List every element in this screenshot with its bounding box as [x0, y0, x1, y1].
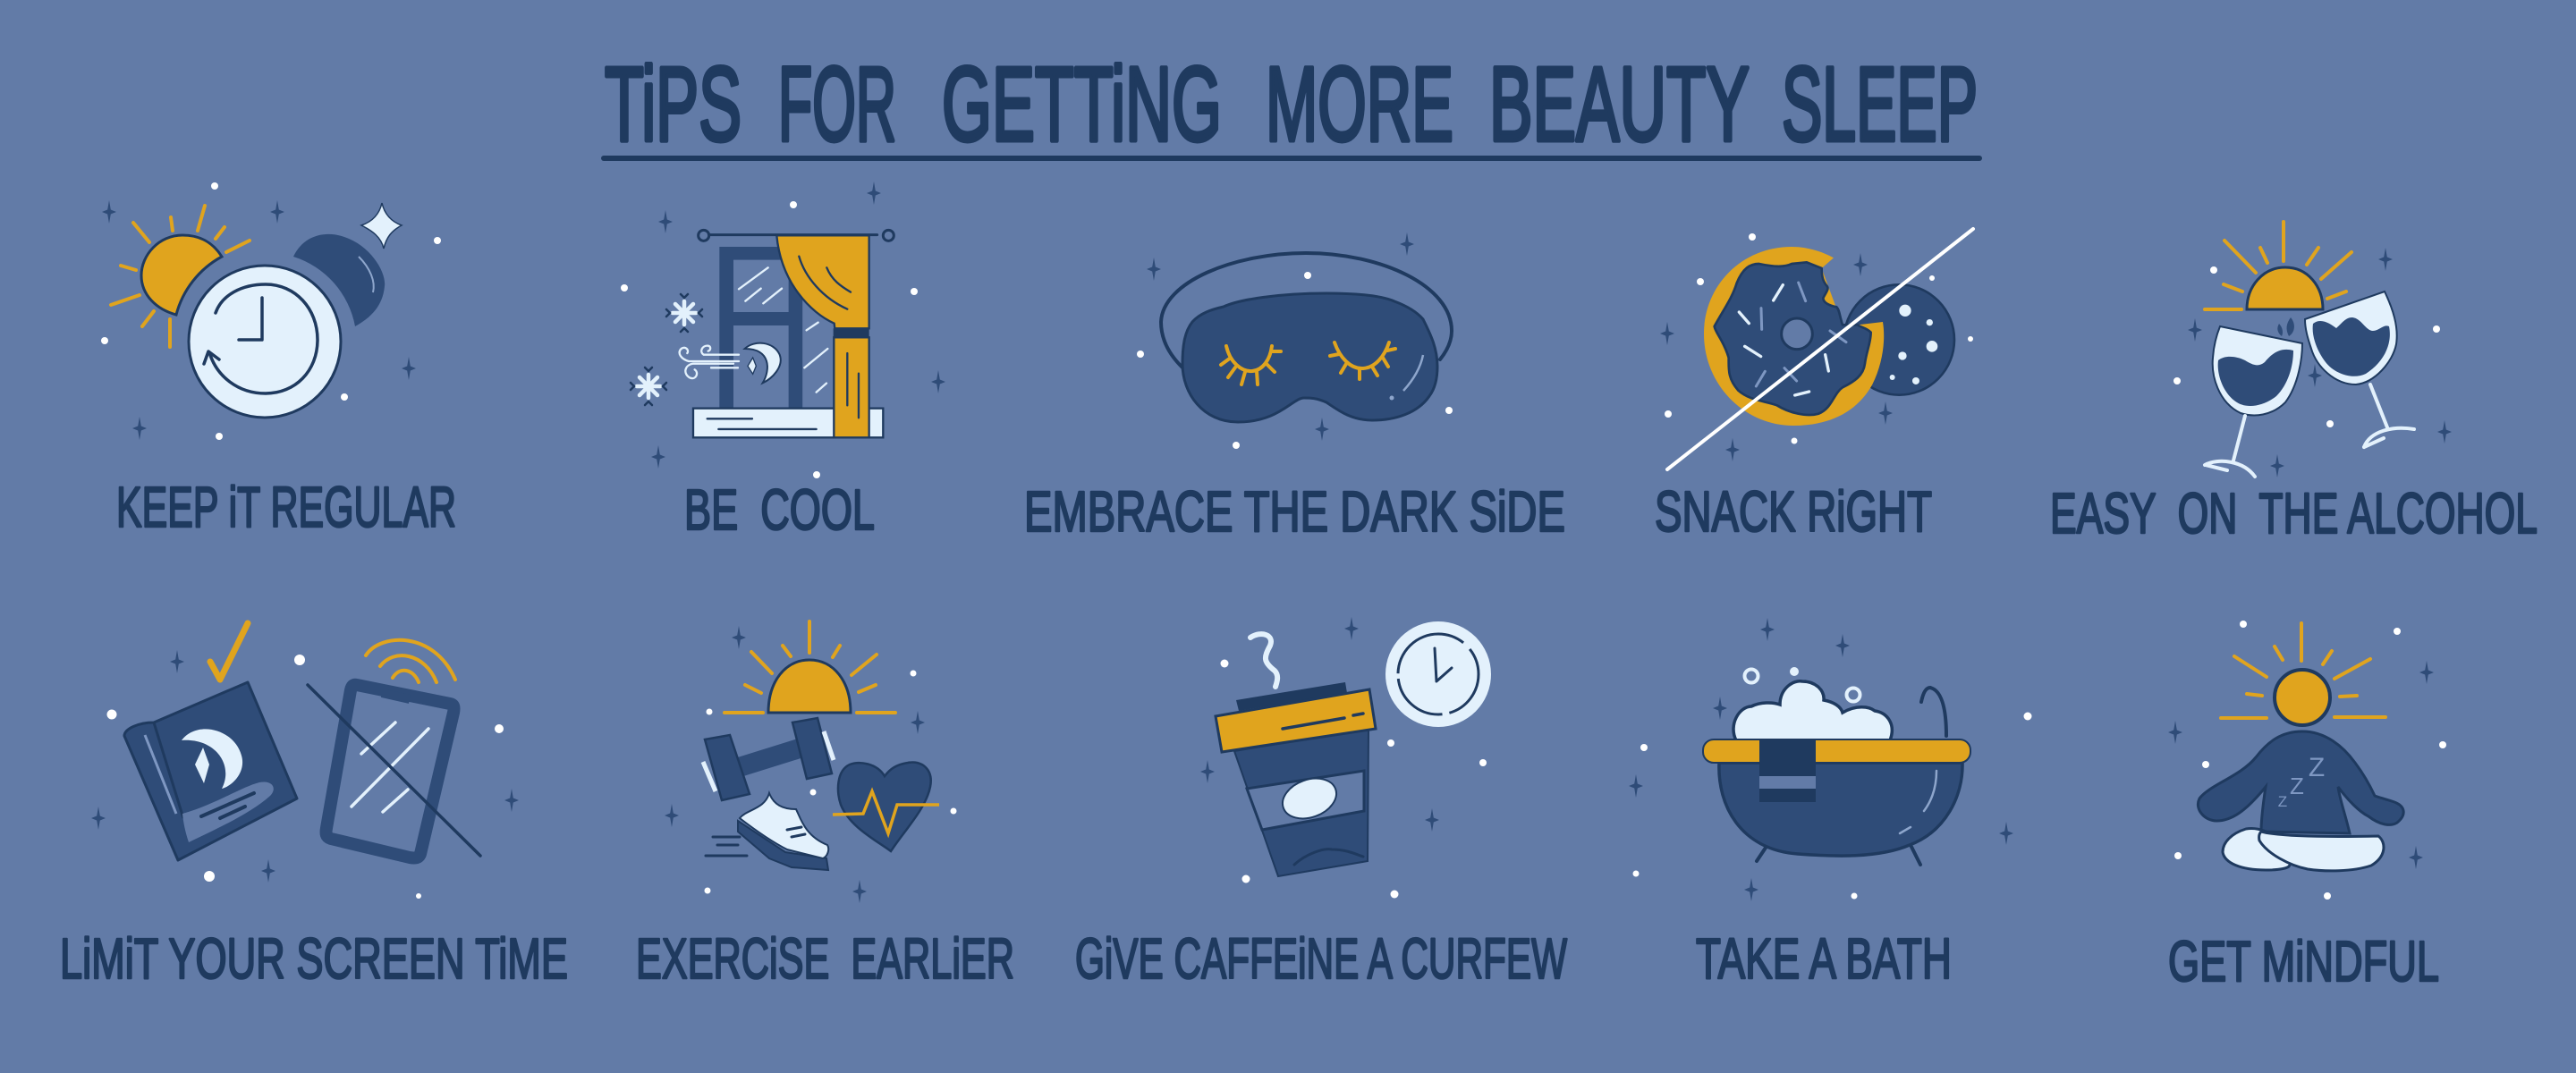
sparkles and dots [1137, 232, 1453, 449]
panel: get mindful [2168, 621, 2446, 993]
sparkles and dots [665, 626, 957, 903]
icon: heart with pulse [833, 762, 939, 851]
label: TAKE A BATH [1696, 926, 1952, 991]
panel: embrace the dark side [1024, 232, 1565, 544]
icon: sleep mask [1161, 253, 1452, 422]
icon: meditating figure [2198, 623, 2403, 871]
icon: book [124, 682, 297, 860]
label: GET MiNDFUL [2168, 929, 2439, 993]
icon: rising sun [2205, 222, 2351, 309]
panel: exercise earlier [636, 621, 1014, 991]
icon: dumbbell [703, 718, 834, 800]
label: LiMiT YOUR SCREEN TiME [60, 926, 568, 991]
label: GiVE CAFFEiNE A CURFEW [1075, 926, 1567, 991]
icon: wine glasses [2205, 291, 2414, 477]
title: TiPS [605, 46, 741, 164]
sparkles and dots [621, 182, 945, 478]
strike-through line [1667, 229, 1973, 469]
sparkles and dots [2174, 248, 2452, 477]
icon: meditating figure: Z [2278, 793, 2287, 810]
sparkles and dots [101, 182, 441, 440]
sparkles and dots [1200, 617, 1487, 898]
label: BE COOL [684, 477, 875, 542]
icon: doughnut and cookie [1704, 247, 1954, 426]
panel: keep it regular [101, 182, 456, 539]
title: FOR [778, 46, 896, 164]
icon: bathtub [1703, 667, 1970, 865]
label: SNACK RiGHT [1655, 479, 1932, 544]
title: MORE [1266, 46, 1453, 164]
label: EXERCiSE EARLiER [636, 926, 1014, 991]
panel: easy on the alcohol [2050, 222, 2538, 545]
title: GETTiNG [942, 46, 1222, 164]
sparkles and dots [91, 650, 519, 899]
icon: phone crossed out [308, 640, 480, 858]
panel: limit your screen time [60, 623, 568, 991]
label: EMBRACE THE DARK SiDE [1024, 479, 1565, 544]
icon: clock [189, 266, 341, 418]
title: SLEEP [1782, 46, 1978, 164]
icon: meditating figure: Z [2290, 773, 2304, 799]
panel: snack right [1655, 229, 1973, 544]
sparkles and dots [2168, 621, 2446, 900]
panel: give caffeine a curfew [1075, 617, 1567, 991]
icon: clock [1385, 621, 1491, 727]
title: BEAUTY [1489, 46, 1750, 164]
panel: be cool [621, 182, 945, 542]
icon: running shoe [706, 793, 828, 870]
title [601, 46, 1982, 164]
icon: snowflakes [631, 294, 702, 405]
label: KEEP iT REGULAR [116, 475, 456, 539]
icon: rising sun [724, 621, 895, 713]
sparkles and dots [1629, 618, 2032, 901]
icon: sun behind clock [111, 206, 250, 347]
sparkles and dots [1660, 233, 1973, 461]
icon: meditating figure: Z [2309, 753, 2325, 782]
icon: window with curtain [680, 230, 894, 437]
panel: take a bath [1629, 618, 2032, 991]
icon: coffee cup [1216, 634, 1376, 876]
icon: moon and star [293, 203, 402, 326]
icon: check mark [210, 623, 248, 680]
